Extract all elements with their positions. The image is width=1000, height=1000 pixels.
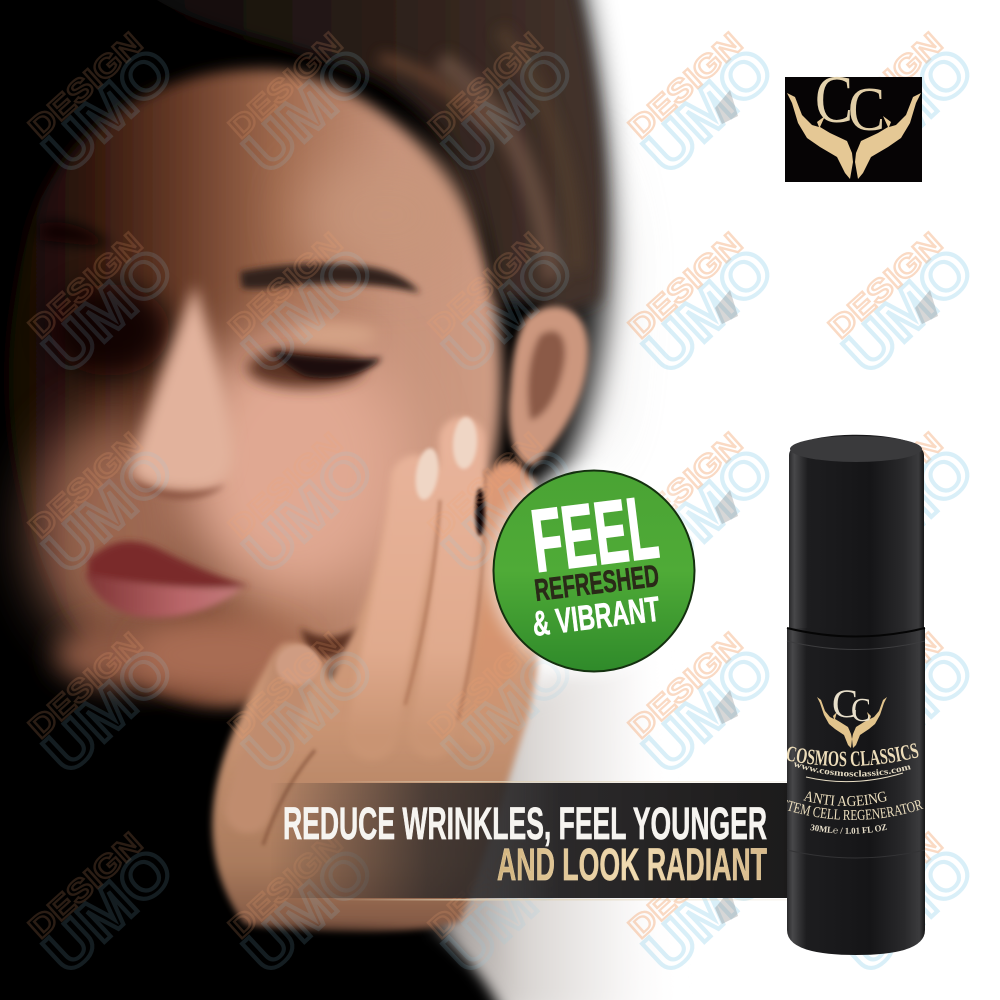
website: www.cosmosclassics.com (794, 762, 911, 777)
watermark over photo: UMO (431, 435, 586, 586)
watermark over photo: DESIGN (22, 426, 149, 545)
watermark over photo: DESIGN (422, 226, 549, 345)
nails (276, 416, 478, 685)
lips (85, 541, 250, 618)
face (9, 69, 502, 706)
FEEL: FEEL (526, 476, 663, 591)
watermark over white: UMO (631, 835, 786, 986)
watermark over photo: UMO (31, 435, 186, 586)
watermark over white: UMO (631, 635, 786, 786)
watermark over photo: DESIGN (22, 626, 149, 745)
watermark over photo: UMO (431, 835, 586, 986)
lower left cheek light (35, 415, 195, 645)
watermark over white: DESIGN (622, 26, 749, 145)
watermark over photo: DESIGN (422, 26, 549, 145)
watermark over photo: DESIGN (422, 626, 549, 745)
jaw crease above thumb (300, 625, 362, 658)
watermark over white: UMO (831, 635, 986, 786)
badge: feel refreshed and vibrant (488, 465, 700, 677)
REFRESHED: REFRESHED (533, 558, 661, 608)
watermark over photo: DESIGN (222, 226, 349, 345)
label divider (806, 773, 903, 782)
shirt (440, 640, 660, 1000)
headline line 2: AND LOOK RADIANT (497, 839, 767, 890)
lower lip (85, 573, 242, 618)
product bottle (786, 434, 926, 955)
watermark over white: DESIGN (822, 426, 949, 545)
watermark over white: DESIGN (622, 426, 749, 545)
hair strands (380, 30, 578, 280)
logo letters: C (815, 61, 853, 137)
fingers (248, 440, 509, 810)
watermark over white: DESIGN (822, 626, 949, 745)
brand name: COSMOS CLASSICS (787, 743, 918, 766)
nose bridge and tip highlight (130, 285, 233, 491)
badge disc (494, 470, 694, 672)
left eye socket (50, 284, 170, 376)
chin tone (135, 617, 305, 693)
eyebrow left (40, 222, 112, 246)
watermark over photo: UMO (31, 235, 186, 386)
banner: tagline (270, 781, 795, 900)
watermark over photo: DESIGN (22, 826, 149, 945)
photo: woman touching her cheek (0, 0, 660, 1000)
watermark over white: UMO (831, 835, 986, 986)
eye lashes (270, 350, 382, 378)
bottle label: C (851, 692, 871, 729)
index finger (372, 480, 416, 735)
banner band (270, 783, 795, 898)
watermark over photo: UMO (431, 235, 586, 386)
watermark over photo: DESIGN (22, 26, 149, 145)
soft shadow beside the hair (575, 120, 618, 480)
hair top (130, 0, 604, 315)
watermark over photo: UMO (231, 635, 386, 786)
product name: STEM CELL REGENERATOR (787, 800, 924, 820)
watermark over white: DESIGN (622, 226, 749, 345)
watermark over white: UMO (831, 435, 986, 586)
watermark over photo: UMO (31, 835, 186, 986)
logo letters: C (848, 76, 885, 144)
upper lip (88, 541, 250, 587)
watermark over white: UMO (631, 435, 786, 586)
lower face tone (55, 623, 205, 687)
logo: CC hands on black (785, 61, 922, 182)
watermark over photo (22, 26, 586, 986)
watermark over white (622, 26, 986, 986)
main cheek highlight (180, 330, 410, 600)
badge glow (488, 465, 700, 677)
bottle logo hands (817, 697, 887, 748)
watermark over white: DESIGN (822, 826, 949, 945)
watermark over photo: UMO (231, 35, 386, 186)
watermark over photo: UMO (431, 35, 586, 186)
watermark over photo: DESIGN (422, 426, 549, 545)
ear (509, 306, 588, 465)
bottom dark shoulder (0, 931, 505, 1000)
eye socket shadow (247, 348, 363, 388)
volume: 30ML℮ / 1.01 FL OZ (810, 824, 887, 834)
watermark over white: DESIGN (822, 26, 949, 145)
watermark over white: DESIGN (622, 826, 749, 945)
bottle logo letters: C (832, 681, 858, 726)
watermark over photo: UMO (31, 635, 186, 786)
dark gap beside ring finger (476, 488, 484, 536)
forehead glow (300, 155, 470, 275)
nose (128, 285, 233, 499)
eyebrow right (240, 264, 420, 293)
watermark over photo: UMO (231, 435, 386, 586)
watermark over photo: UMO (231, 235, 386, 386)
watermark over white: UMO (631, 35, 786, 186)
watermark over photo: DESIGN (422, 826, 549, 945)
watermark over photo: DESIGN (22, 226, 149, 345)
watermark over white: DESIGN (822, 226, 949, 345)
watermark over photo: UMO (431, 635, 586, 786)
product line: ANTI AGEING (803, 792, 887, 806)
ring finger (480, 482, 509, 725)
bottle label (787, 690, 924, 834)
middle finger (432, 440, 462, 735)
watermark over photo: DESIGN (222, 26, 349, 145)
watermark over white: UMO (831, 235, 986, 386)
bottle cap (789, 435, 924, 628)
hand base (212, 470, 542, 933)
dark backdrop and hair mass (0, 0, 609, 1000)
finger gap shadows (263, 470, 485, 845)
watermark over photo: DESIGN (222, 626, 349, 745)
collar seams (787, 628, 925, 858)
and vibrant: & VIBRANT (530, 590, 662, 644)
bottle body (787, 628, 925, 955)
cap top (790, 436, 922, 462)
banner rules (330, 781, 790, 782)
upper eyelid (293, 323, 377, 347)
watermark over white: DESIGN (622, 626, 749, 745)
watermark over photo: UMO (31, 35, 186, 186)
watermark over white: UMO (831, 35, 986, 186)
watermark over photo: DESIGN (222, 426, 349, 545)
watermark over photo: DESIGN (222, 826, 349, 945)
logo hands (787, 93, 921, 179)
watermark over white: UMO (631, 235, 786, 386)
thumb (248, 668, 293, 810)
logo letters (815, 61, 885, 144)
watermark over photo: UMO (231, 835, 386, 986)
nostril shadow (128, 478, 226, 499)
